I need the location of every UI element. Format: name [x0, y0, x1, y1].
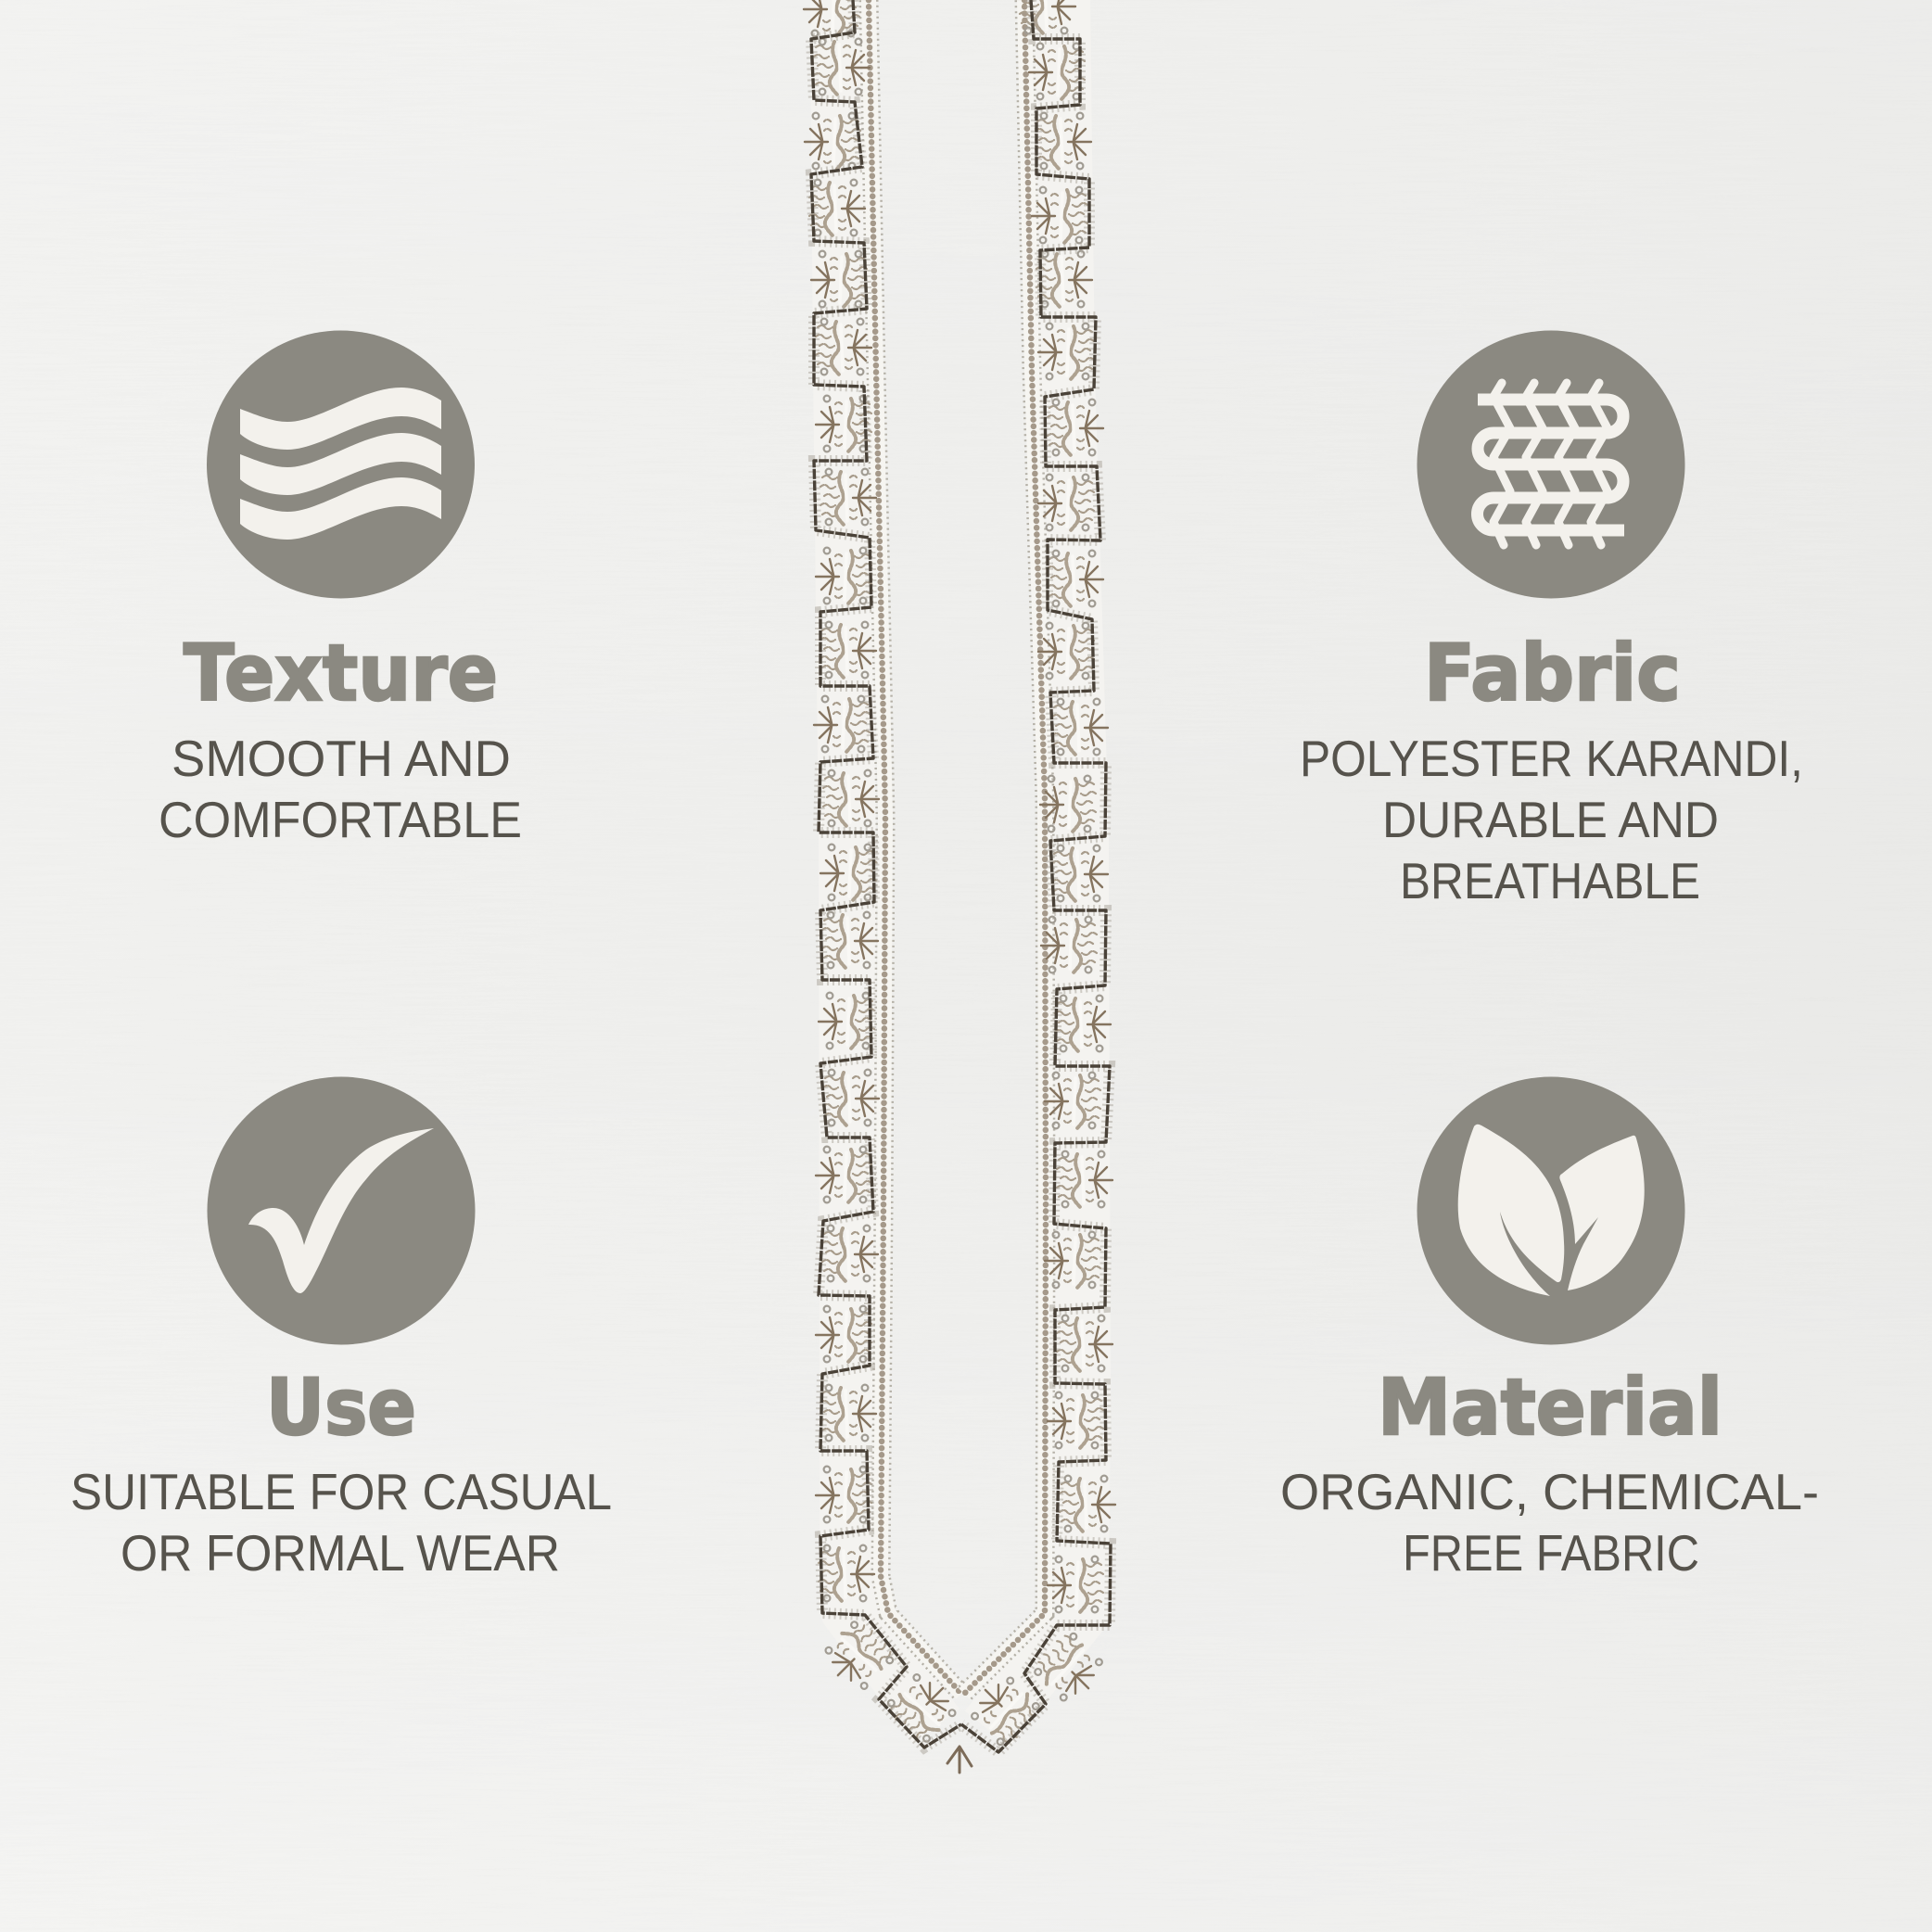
- description: material: FREE FABRIC: [1403, 1524, 1699, 1582]
- bottom stitched arrow: [947, 1747, 972, 1773]
- description: fabric: BREATHABLE: [1400, 852, 1700, 909]
- description: texture: COMFORTABLE: [159, 791, 522, 848]
- description: fabric: [1300, 730, 1803, 909]
- description: fabric: POLYESTER KARANDI,: [1300, 730, 1803, 787]
- heading: material: Material: [1378, 1362, 1722, 1453]
- icon: knit weave in circle: [1417, 330, 1685, 599]
- icon: waves in circle: [207, 330, 475, 599]
- description: texture: SMOOTH AND: [172, 730, 511, 787]
- left embroidery column: [804, 0, 962, 1748]
- panel: use: [70, 1077, 612, 1582]
- icon: leaves in circle: [1417, 1077, 1685, 1344]
- panel: material: [1280, 1077, 1819, 1582]
- heading: fabric: Fabric: [1424, 628, 1681, 718]
- icon: check mark in circle: [208, 1077, 475, 1344]
- description: use: SUITABLE FOR CASUAL: [70, 1463, 612, 1520]
- description: material: [1280, 1463, 1819, 1582]
- heading: texture: Texture: [184, 628, 498, 718]
- description: texture: [159, 730, 522, 848]
- embroidered neckline: [804, 0, 1115, 1773]
- panel: texture: [159, 330, 522, 848]
- description: use: OR FORMAL WEAR: [121, 1524, 560, 1582]
- panel: fabric: [1300, 330, 1803, 909]
- description: fabric: DURABLE AND: [1382, 791, 1719, 848]
- right embroidery column: [961, 0, 1115, 1752]
- heading: use: Use: [266, 1362, 416, 1453]
- description: material: ORGANIC, CHEMICAL-: [1280, 1463, 1819, 1520]
- description: use: [70, 1463, 612, 1582]
